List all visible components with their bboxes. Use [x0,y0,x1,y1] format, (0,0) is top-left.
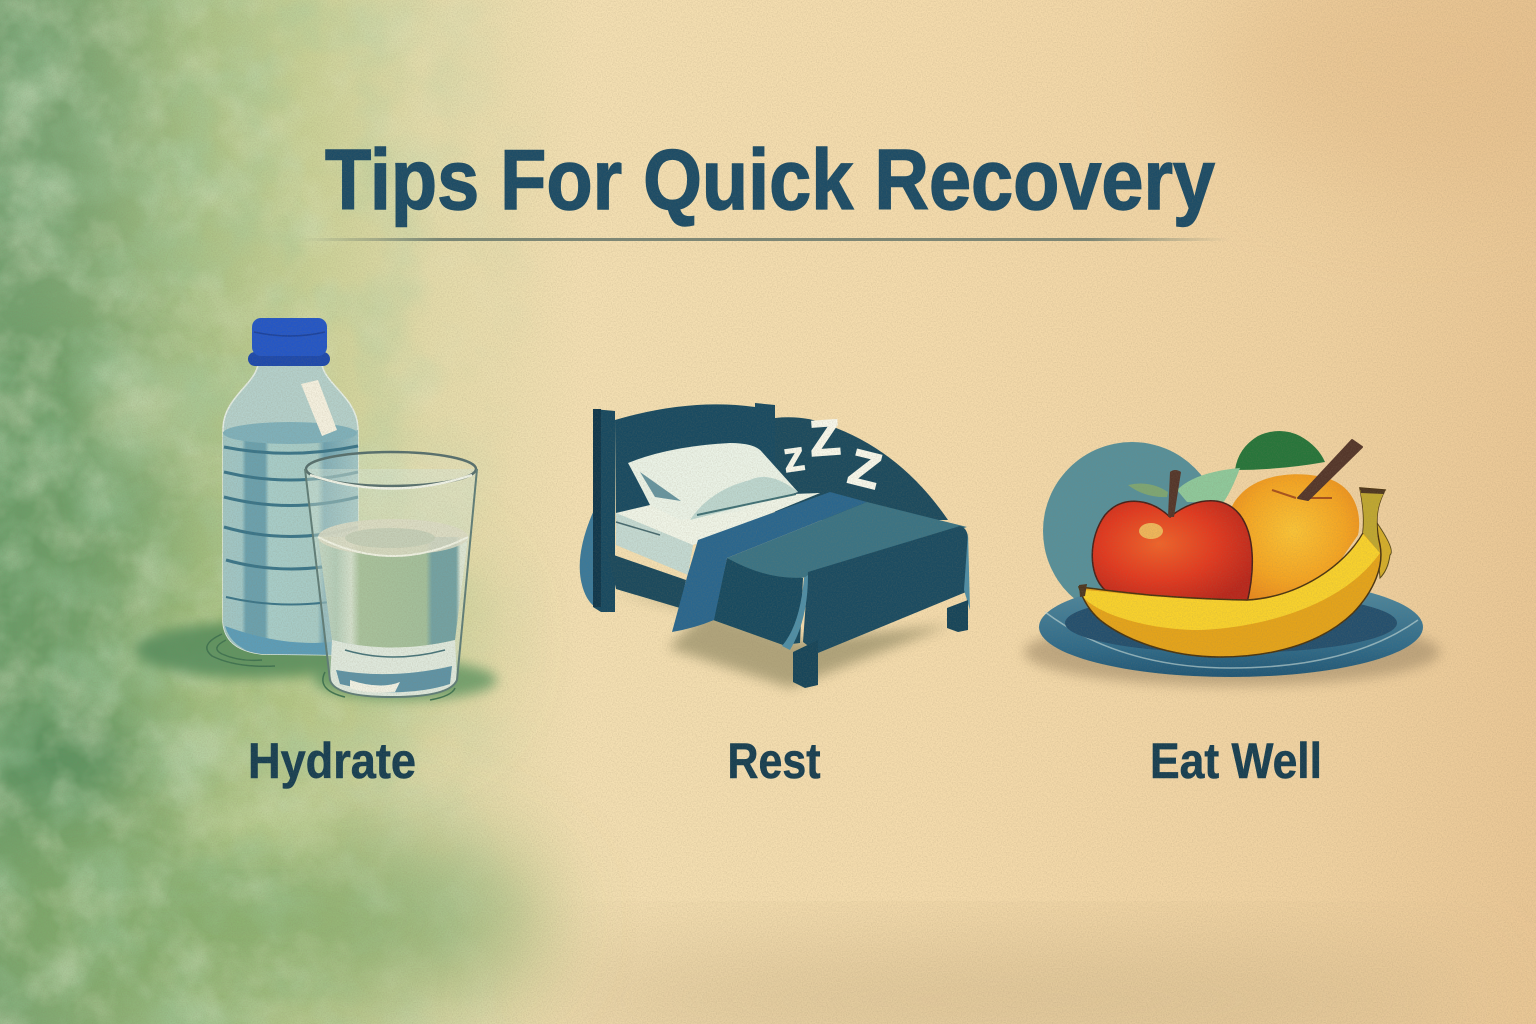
pale leaves [1128,468,1240,503]
sheet behind post [580,510,594,606]
bed rail [608,553,686,608]
sleep letters [782,409,887,500]
label: Rest: Rest [728,733,821,789]
label: Hydrate: Hydrate [248,733,416,789]
headboard [615,403,775,530]
icon: plate of fruit [1024,431,1440,686]
blanket lighter edges [782,532,970,650]
teal circle backdrop [1043,442,1221,620]
sleep letters: Z [782,441,806,479]
orange fruit [1228,431,1362,600]
bed legs [793,600,968,688]
title underline [300,238,1230,241]
stem leaf [1235,431,1325,470]
plate [1039,577,1423,677]
title: Tips For Quick Recovery [325,133,1215,228]
icon: water bottle and glass [135,318,497,700]
blanket top [727,502,967,578]
water glass [305,452,477,697]
water ripples [207,634,455,700]
banana [1079,488,1391,657]
sleep letters: Z [808,409,842,467]
water bottle [223,318,358,655]
pillow [628,443,798,520]
blue sheet strip [672,492,867,632]
blanket underside [713,558,803,645]
ground shadow [135,622,497,700]
blanket front [803,526,968,653]
label: Eat Well: Eat Well [1150,733,1322,789]
plate shadow [1024,618,1440,686]
icon: bed with zzz [580,403,970,688]
sleep letters: Z [843,438,887,500]
floor shadow [612,592,950,688]
mattress [616,493,820,575]
arched side panel [775,417,948,520]
left bed post [593,409,615,612]
apple [1092,470,1252,603]
